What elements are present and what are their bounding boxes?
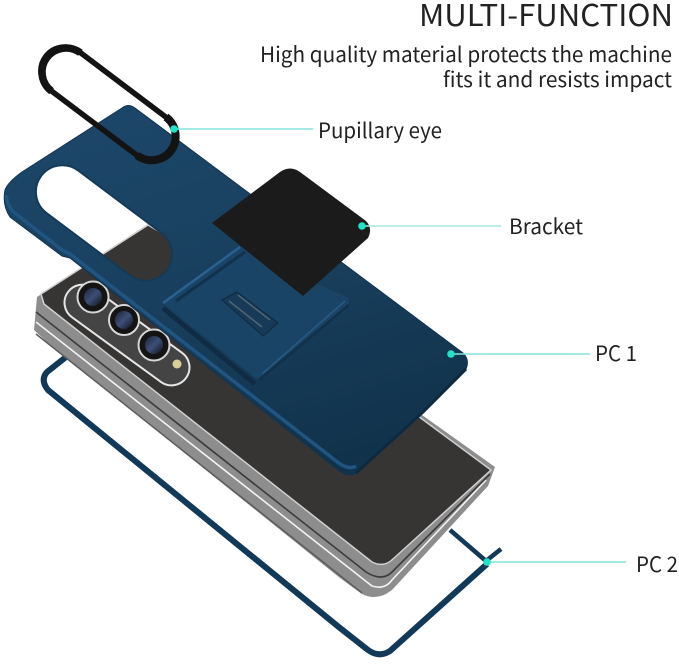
case lower side wall <box>356 369 466 473</box>
callout: PC 1 leader <box>447 350 590 358</box>
bracket: black flip plate <box>212 168 370 296</box>
kickstand hinge <box>222 292 278 336</box>
case: PC 1 back cover <box>4 106 467 475</box>
phone edge highlights <box>36 322 486 587</box>
label: bracket: Bracket <box>509 211 583 241</box>
case left wall highlight <box>6 195 356 468</box>
description text: fits it and resists impact <box>443 64 672 94</box>
callout: PC 2 leader <box>483 558 626 566</box>
lower rail <box>259 305 349 380</box>
description text: High quality material protects the machine <box>260 39 672 69</box>
phone back panel <box>41 225 491 564</box>
description text <box>260 39 672 94</box>
label: PC 2: PC 2 <box>636 549 678 579</box>
case body with lens cut-out <box>4 106 467 475</box>
callout: bracket leader <box>358 222 501 230</box>
camera island <box>57 278 197 392</box>
phone: folded handset <box>34 224 495 597</box>
phone side band <box>34 224 495 597</box>
lens 3 <box>138 330 170 360</box>
recess shadow <box>163 308 255 384</box>
bracket recess <box>163 247 350 384</box>
lens cut-out rim <box>36 165 172 281</box>
label: pupillary eye: Pupillary eye <box>318 115 442 145</box>
lens 2 <box>109 305 139 335</box>
label: PC 1: PC 1 <box>595 338 637 368</box>
upper rail <box>163 247 240 303</box>
ring: pupillary eye camera ring <box>31 37 186 171</box>
lens 1 <box>78 282 108 312</box>
callout: pupillary eye leader <box>170 125 313 133</box>
flash <box>172 360 182 368</box>
frame: PC 2 lower bumper <box>44 357 501 654</box>
